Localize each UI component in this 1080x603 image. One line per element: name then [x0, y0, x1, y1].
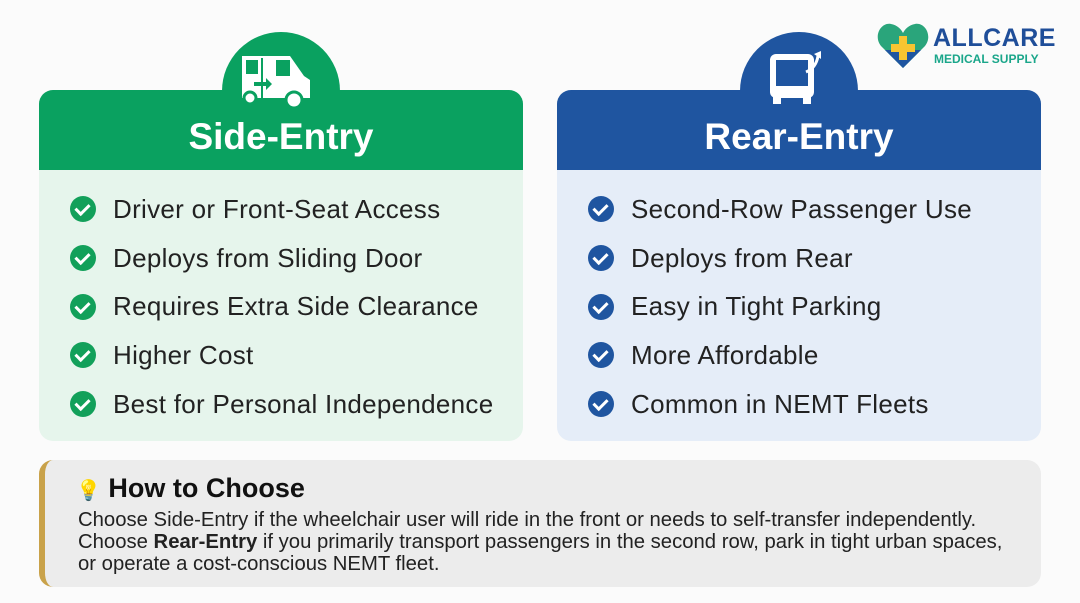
heading: side-entry: Side-Entry — [188, 116, 374, 157]
dome: side-entry — [222, 32, 340, 150]
list: side-entry features: Requires Extra Side Clearance — [113, 291, 479, 321]
icon: heart — [878, 24, 928, 68]
list: rear-entry features: More Affordable — [631, 340, 819, 370]
list: side-entry features: Deploys from Sliding Door — [113, 243, 423, 273]
icon: rear van — [770, 51, 821, 104]
callout: how to choose — [39, 460, 1041, 587]
text: guidance: Choose Rear-Entry if you primarily transport passengers in the second row, park in tight urban spaces, — [78, 531, 1002, 553]
heading: how to choose: 💡 How to Choose — [76, 473, 305, 503]
logo — [878, 24, 1056, 68]
list: side-entry features: Higher Cost — [113, 340, 254, 370]
dome: rear-entry — [740, 32, 858, 150]
logo: ALLCARE — [933, 24, 1056, 52]
list: rear-entry features: Deploys from Rear — [631, 243, 853, 273]
text: guidance: Choose Side-Entry if the wheelchair user will ride in the front or needs to self-transfer independently. — [78, 509, 976, 531]
text: guidance: or operate a cost-conscious NEMT fleet. — [78, 553, 439, 575]
list: side-entry features: Driver or Front-Seat Access — [113, 194, 440, 224]
list: rear-entry features — [588, 194, 972, 419]
heading: side-entry — [39, 90, 523, 170]
icon: side van — [242, 56, 310, 106]
heading: rear-entry — [557, 90, 1041, 170]
list: side-entry features: Best for Personal Independence — [113, 389, 493, 419]
list: rear-entry features: Easy in Tight Parking — [631, 291, 882, 321]
list: side-entry features — [70, 194, 493, 419]
panel: side-entry — [39, 90, 523, 441]
list: rear-entry features: Second-Row Passenger Use — [631, 194, 972, 224]
list: rear-entry features: Common in NEMT Fleets — [631, 389, 929, 419]
heading: rear-entry: Rear-Entry — [704, 116, 894, 157]
panel: rear-entry — [557, 90, 1041, 441]
text: guidance — [78, 509, 1002, 575]
logo: MEDICAL SUPPLY — [934, 52, 1039, 66]
